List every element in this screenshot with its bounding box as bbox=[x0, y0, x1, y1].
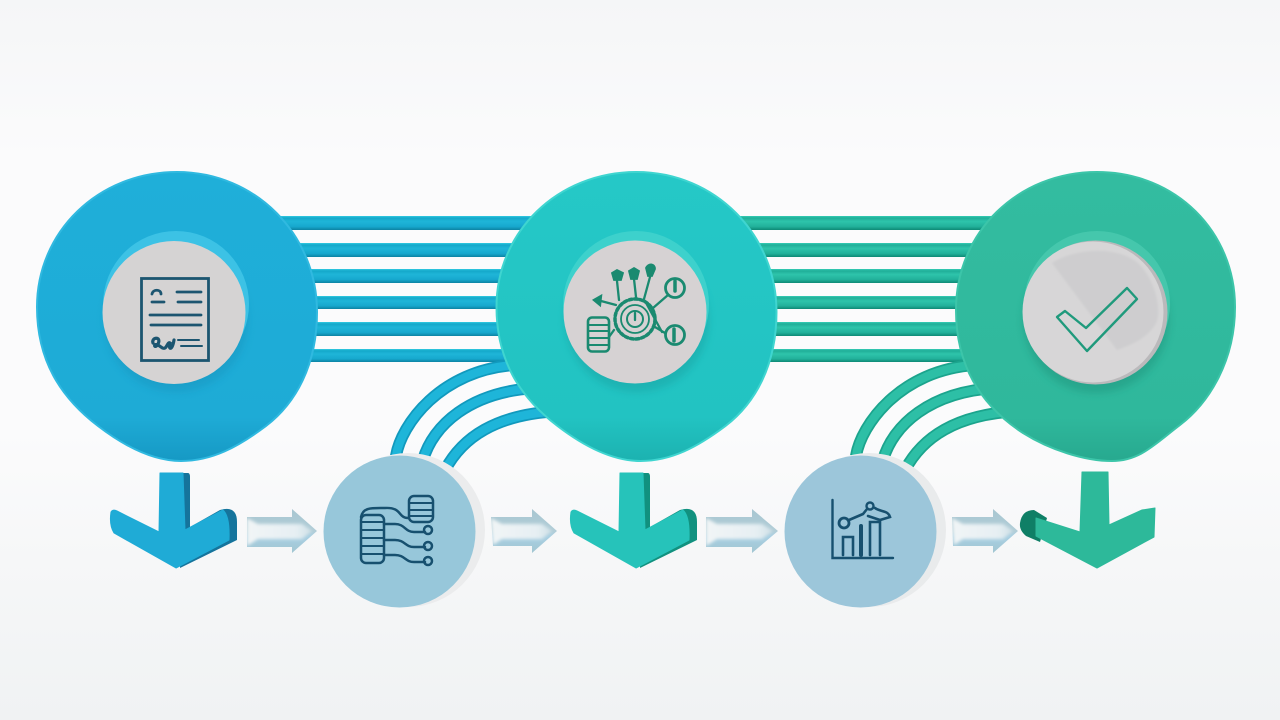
icon: signed document bbox=[142, 278, 208, 360]
arrow side shading bbox=[640, 473, 697, 568]
arrow inner highlight bbox=[247, 518, 312, 546]
arrow inner highlight bbox=[952, 518, 1013, 545]
icon: checkmark outline bbox=[1057, 288, 1137, 351]
arrow body bbox=[706, 509, 778, 553]
node backing shadow bbox=[331, 453, 485, 607]
button facet highlight bbox=[1052, 251, 1158, 350]
green outer disc bbox=[956, 172, 1235, 461]
button shadow and halo bbox=[563, 231, 709, 392]
node backing shadow bbox=[792, 453, 946, 607]
data node bbox=[324, 453, 485, 608]
step 3 disc: checkmark bbox=[956, 172, 1235, 461]
node disc bbox=[324, 456, 476, 608]
down arrow 3 bbox=[1020, 472, 1155, 568]
icon: bar chart with trend bbox=[832, 500, 893, 558]
arrow body bbox=[952, 509, 1018, 553]
button shadow and halo bbox=[1023, 231, 1170, 393]
down arrow 2 bbox=[570, 473, 697, 568]
button rim bbox=[1024, 240, 1168, 384]
small arrow 2 bbox=[491, 509, 557, 553]
arrow body bbox=[491, 509, 557, 553]
step 1 disc: document bbox=[37, 172, 317, 461]
arrow side shading bbox=[1020, 510, 1047, 542]
grey button bbox=[102, 241, 246, 384]
step 2 disc: processing hub bbox=[496, 172, 776, 461]
button shadow and halo bbox=[103, 231, 249, 392]
connector lines: green bundle between step 2 and step 3 bbox=[730, 216, 1000, 362]
curved connectors: green arcs from analytics node to step 3 bbox=[856, 365, 1020, 470]
arrow side shading bbox=[180, 473, 237, 568]
small arrow 4 bbox=[952, 509, 1018, 553]
blue outer disc bbox=[37, 172, 317, 461]
node disc bbox=[784, 456, 936, 608]
teal outer disc bbox=[496, 172, 776, 461]
arrow inner highlight bbox=[491, 518, 552, 545]
grey button bbox=[1022, 242, 1164, 382]
small arrow 1 bbox=[247, 509, 317, 553]
icon: databases with connections bbox=[361, 496, 433, 565]
arrow body bbox=[247, 509, 317, 553]
arrow inner highlight bbox=[706, 518, 773, 546]
arrow face bbox=[1036, 472, 1155, 568]
arrow face bbox=[570, 473, 689, 568]
grey button bbox=[564, 240, 706, 384]
small arrow 3 bbox=[706, 509, 778, 553]
arrow face bbox=[110, 473, 229, 568]
connector lines: blue bundle between step 1 and step 2 bbox=[270, 216, 540, 362]
analytics node bbox=[784, 453, 946, 608]
down arrow 1 bbox=[110, 473, 237, 568]
icon: gear hub with nodes bbox=[588, 264, 684, 352]
curved connectors: blue arcs from data node to step 2 bbox=[396, 365, 560, 470]
